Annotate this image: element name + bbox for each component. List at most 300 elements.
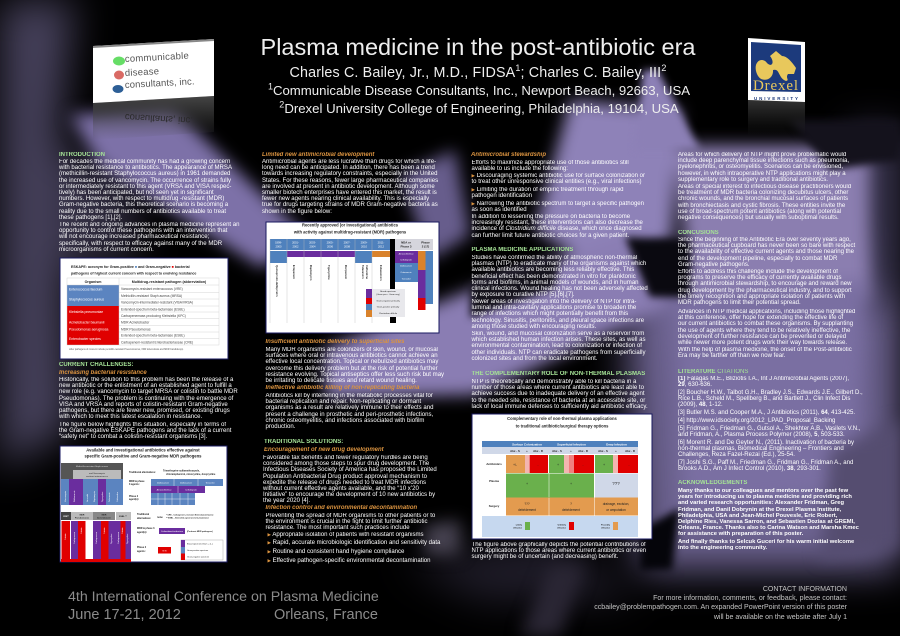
subheading: encouragement of new drug development: Encouragement of new drug development — [264, 446, 384, 452]
conclusions paragraph 2: Efforts to address this challenge include the development of — [678, 269, 838, 275]
plasma paragraph 3: Skin, wound, and mucosal colonization serve as a reservoir from — [472, 331, 644, 337]
ineffective killing paragraph: bacterial replication and repair. Non-replicating or dormant — [266, 399, 421, 405]
figure: complementary role table: Abx - R — [533, 449, 543, 453]
figure: recently approved antibiotics timeline: 2002 — [293, 244, 299, 248]
introduction paragraph 2: The recent and ongoing advances in plasma medicine represent an — [59, 222, 240, 228]
complementary paragraph: achieve success due to inadequate delivery of an effective agent — [472, 391, 645, 397]
infection control bullets — [268, 532, 440, 564]
problematic areas paragraph: supplementary role to surgery and traditional antibiotics. — [678, 177, 828, 183]
encouragement paragraph: Initiative” to encourage the development of 10 new antibiotics by — [263, 492, 435, 498]
figure: recently approved antibiotics timeline: 2007- — [344, 240, 351, 244]
title: Plasma medicine in the post-antibiotic era — [261, 34, 695, 60]
figure: available and investigational antibiotics: Linezolid — [87, 493, 89, 502]
figure: recently approved antibiotics timeline: Ceftobiprole — [400, 258, 413, 262]
figure: complementary role table: Superficial Infection — [557, 442, 586, 446]
stewardship closing paragraph: increasingly resistant, these interventions can also decrease the — [472, 220, 643, 226]
figure: complementary role table: Abx - S — [510, 449, 520, 453]
figure: ESKAPE table: ESKAPE: acronym for Gram-positive ■ and Gram-negative ■ bacterial — [71, 265, 190, 269]
figure: available and investigational antibiotics: Methicillin-resistant Staph aureus — [76, 465, 109, 468]
introduction paragraph 1: or intermediately resistant to this agent (VRSA and VISA respec- — [59, 184, 231, 190]
conclusions paragraph 2: drug development by the pharmaceutical industry, and to support — [678, 288, 852, 294]
acknowledgements paragraph 1: Delphine Ries, Vanessa Sarron, and Sebastien Dozias at GREMI, — [678, 519, 855, 525]
figure: available and investigational antibiotics: Carbapenem — [95, 532, 98, 544]
insufficient delivery paragraph: be irritating to delicate tissues and retard wound healing. — [266, 378, 417, 384]
figure: available and investigational antibiotics: Colistin — [64, 532, 67, 540]
areas of interest paragraph: be treatment of MDR bacteria colonizing decubitus ulcers, other — [678, 190, 848, 196]
figure: available and investigational antibiotics: Colistin — [121, 526, 124, 534]
plasma paragraph 2: among those studied with encouraging results. — [472, 324, 596, 330]
contact information: CONTACT INFORMATION — [763, 586, 847, 593]
figure: recently approved antibiotics timeline: 2001- — [292, 240, 299, 244]
acknowledgements paragraph 1 — [678, 488, 859, 537]
plasma paragraph 1: plasmas (NTP) to eradicate many of the organisms against which — [472, 261, 646, 267]
stewardship bullet 3 — [472, 201, 644, 213]
complementary paragraph: number of those areas where current antibiotics are least able to — [472, 385, 644, 391]
conclusions paragraph 1: to the availability of effective current agents and those nearing the — [678, 249, 854, 255]
figure: complementary role table: - — [582, 463, 584, 467]
introduction paragraph 1: tively) has been anticipated, but not seen yet in significant — [59, 190, 214, 196]
conclusions paragraph 2 — [678, 269, 852, 306]
figure: complementary role table: debridement — [518, 508, 536, 512]
infection control paragraph: Preventing the spread of MDR organisms to other patients or to — [266, 513, 435, 519]
stewardship closing paragraph: In addition to lessening the pressure on bacteria to become — [472, 214, 630, 220]
conclusions paragraph 3: while newer more potent drugs work their way towards release. — [678, 340, 847, 346]
figure: available and investigational antibiotics: Phase 2 — [137, 546, 147, 549]
acknowledgements paragraph 2: And finally thanks to Selcuk Guceri for his warm initial welcome — [678, 539, 854, 545]
plasma paragraph 1: clinical infections. Wound healing has not been adversely affected — [472, 286, 648, 292]
ineffective killing paragraph — [266, 393, 434, 430]
stewardship bullet 2: pathogen identification — [472, 193, 532, 199]
figure: complementary role table: Abx - S — [598, 449, 608, 453]
challenges paragraph 2: the Gram-negative ESKAPE pathogens and the lack of a current — [59, 428, 231, 434]
figure caption: NTP applications to those areas where current antibiotics or even — [472, 548, 646, 554]
conclusions paragraph 1: Since the beginning of the Antibiotic Era over seventy years ago, — [678, 237, 851, 243]
figure: recently approved antibiotics timeline: Recently approved (or investigational) antibiotics — [302, 222, 399, 228]
infection control paragraph — [266, 513, 435, 531]
figure caption: surgery might be of uncertain (and decreasing) benefit. — [472, 554, 618, 560]
figure: available and investigational antibiotics: alternatives: — [137, 517, 151, 520]
citations list: [1] Falagas M.E., Bliziotis I.A., Int J Antimicrobial Agents (2007), — [678, 376, 849, 382]
subheading: insufficient antibiotic delivery: Insufficient antibiotic delivery to superficial sites — [266, 338, 404, 344]
figure: recently approved antibiotics timeline: Quinupristin-dalfopristin — [275, 265, 279, 297]
citations list: Brooks A.D., Am J Infect Control (2010), 38, 293-301. — [678, 466, 821, 472]
areas of interest paragraph: with bronchiectasis and cystic fibrosis. These entities invite the — [678, 203, 845, 209]
areas of interest paragraph — [678, 184, 851, 221]
challenges paragraph 1: Historically, the solution to this problem has been the release of a — [59, 377, 233, 383]
figure: available and investigational antibiotics: Trimethoprim-sulfamethoxazole, — [163, 470, 200, 472]
figure: recently approved antibiotics timeline: Broad-spectrum — [380, 290, 396, 293]
subheading: antimicrobial stewardship: Antimicrobial stewardship — [471, 152, 546, 158]
figure: available and investigational antibiotics: Carbapenem — [117, 532, 120, 544]
figure: ESKAPE table: Pseudomonas aeruginosa — [69, 328, 109, 332]
introduction paragraph 1: numbers. However, with respect to multidrug -resistant (MDR) — [59, 196, 224, 202]
figure: available and investigational antibiotics: none — [157, 516, 163, 519]
insufficient delivery paragraph: surfaces where oral or intravenous antibiotics cannot achieve an — [266, 353, 438, 359]
figure: complementary role table: Plasma — [489, 479, 499, 483]
figure: available and investigational antibiotics: Tenovolvi — [205, 482, 215, 484]
figure: recently approved antibiotics timeline: Clostridium difficile — [379, 312, 398, 315]
figure: complementary role table: ??? — [612, 481, 620, 486]
figure: ESKAPE table: MDR Acinetobacter — [121, 320, 150, 324]
citations list: (2009), 48, 1-12. [3] Butler M.S. and Cooper M.A., J Antibiotics (2011), 64, 413-425. [4] http://www.idsociety.org/2012_LPAD_Proposal_Backing [5] Fridman G., Friedman G., Gutsol A., Shekhter A.B., Vasilets V.N., — [678, 402, 860, 432]
introduction paragraph 2: opportunity to control these pathogens with an intervention that — [59, 228, 227, 234]
figure: recently approved antibiotics timeline: 2010 — [361, 244, 367, 248]
problematic areas paragraph: include deep parenchymal tissue infections such as pneumonia, — [678, 158, 849, 164]
conclusions paragraph 3: development of further resistance can be prevented or delayed — [678, 334, 846, 340]
figure: ESKAPE table: other pathogens of concern include penicillin-resistant Pneumococcus, XDR tuberculosis and MDR Candida spp. — [69, 348, 184, 351]
figure: ESKAPE table: Enterococcus faecium — [69, 288, 103, 292]
plasma paragraph 1: Studies have confirmed the ability of atmospheric non-thermal — [472, 255, 637, 261]
figure: available and investigational antibiotics: Colistin — [80, 526, 83, 534]
subheading: ineffective antibiotic killing: Ineffective antibiotic killing of non-replicating bacteria — [266, 384, 419, 390]
figure: available and investigational antibiotics: Tigecycline — [102, 491, 104, 502]
figure: available and investigational antibiotics: M N — [162, 550, 167, 552]
citations list: 29, 630-636. [2] Boucher H.W., Talbot G.H., Bradley J.S., Edwards J.E., Gilbert D., — [678, 382, 863, 396]
figure: recently approved antibiotics timeline: 1999- — [275, 240, 282, 244]
complementary paragraph: to the needed site, resistance of bacteria at an accessible site, or — [472, 398, 645, 404]
figure: complementary role table: Deep Infection — [606, 442, 627, 446]
figure: available and investigational antibiotics: Ceftaroline — [116, 491, 119, 502]
figure: available and investigational antibiotics: Amoxicillin/clav — [157, 488, 172, 492]
introduction paragraph 1: these pathogens [1],[2]. — [59, 215, 122, 221]
logo: communicable disease consultants: communicable — [125, 51, 189, 65]
section: introduction: INTRODUCTION — [59, 152, 105, 158]
figure: available and investigational antibiotics: agent(s): — [137, 531, 147, 534]
stewardship bullet 2 — [472, 187, 624, 199]
figure: complementary role table: Likely — [516, 524, 523, 526]
figure: available and investigational antibiotics: ESBL ** — [119, 516, 127, 518]
figure: available and investigational antibiotics: Gram-negative spectrum — [187, 556, 209, 558]
introduction paragraph 1: the increased use of vancomycin. The occurrence of strains fully — [59, 178, 231, 184]
figure: ESKAPE table: Multidrug-resistant pathogen (abbreviation) — [132, 280, 207, 284]
figure: available and investigational antibiotics: and Vancomycin — [89, 473, 106, 475]
complementary paragraph: lack of local immune defenses to sufficiently aid antibiotic efficacy. — [472, 404, 648, 410]
figure: complementary role table: Possibly — [601, 524, 611, 526]
stewardship bullet 3: ▶ Narrowing the antibiotic spectrum to target a specific pathogen — [472, 201, 644, 207]
figure: recently approved antibiotics timeline: Tigecycline — [327, 265, 331, 280]
conclusions paragraph 2: through antimicrobial stewardship, to encourage and reward new — [678, 281, 851, 287]
plasma paragraph 1: available antibiotics are becoming less reliably effective. This — [472, 267, 634, 273]
insufficient delivery paragraph: effective local concentration. Topical or nebulized antibiotics may — [266, 359, 438, 365]
encouragement paragraph: Population Antibacterial Drug product approval mechanism to — [263, 474, 427, 480]
stewardship bullets — [472, 173, 645, 185]
figure: complementary role table: - — [628, 463, 630, 467]
figure caption: The figure above graphically depicts the potential contributions of — [472, 542, 646, 548]
acknowledgements paragraph 1: for assistance with preparation of this poster. — [678, 531, 803, 537]
figure: recently approved antibiotics timeline: 2004 — [310, 244, 316, 248]
limited development paragraph: smaller biotech enterprises have entered this market, the result is — [262, 190, 437, 196]
figure: available and investigational antibiotics: Available and investigational antibiotics effective against — [86, 448, 200, 452]
conclusions paragraph 1: the pharmaceutical cupboard has never been so bare with respect — [678, 243, 855, 249]
challenges paragraph 1: new role (e.g. vancomycin to target MRSA or colistin to battle MDR — [59, 389, 238, 395]
figure: available and investigational antibiotics: Ceftobiprole — [185, 488, 198, 492]
conclusions paragraph 3 — [678, 309, 855, 346]
plasma paragraph 1: by exposure to curative NTP [5],[6],[7]. — [472, 292, 575, 298]
figure: recently approved antibiotics timeline: 2012 — [378, 244, 384, 248]
figure: available and investigational antibiotics: Gram-positive spectrum — [187, 549, 209, 552]
figure: recently approved antibiotics timeline: Daptomycin — [309, 265, 313, 281]
figure: available and investigational antibiotics: Vancomycin — [65, 490, 67, 502]
introduction paragraph 2: microorganisms of current concern. — [59, 247, 154, 253]
infection control paragraph: resistance. The most important such practices include — [266, 525, 410, 531]
acknowledgements paragraph 1: Many thanks to our colleagues and mentors over the past few — [678, 488, 848, 494]
figure: available and investigational antibiotics: (Pertinent MDR pathogens) — [187, 530, 213, 533]
infection control bullets: ▶ Rapid, accurate microbiologic identification and sensitivity data — [268, 540, 440, 546]
plasma paragraph 2: range of infections which might potentially benefit from this — [472, 311, 628, 317]
challenges paragraph 2: The figure below highlights this situation, especially in terms of — [59, 422, 226, 428]
figure: complementary role table: Abx - R — [625, 449, 635, 453]
limited development paragraph: fewer new agents nearing clinical availability. This is especially — [262, 196, 429, 202]
complementary paragraph: NTP is theoretically and demonstrably able to kill bacteria in a — [472, 379, 636, 385]
figure: available and investigational antibiotics: Tigecycline — [127, 533, 129, 544]
conference name: 4th International Conference on Plasma Medicine — [68, 589, 379, 605]
figure: complementary role table: drainage, excision, — [603, 502, 629, 506]
encouragement paragraph — [263, 455, 437, 504]
figure: complementary role table: - — [537, 463, 539, 467]
stewardship intro — [472, 160, 629, 172]
stewardship intro: Efforts to maximize appropriate use of those antibiotics still — [472, 160, 629, 166]
plasma paragraph 2: luminal and intra-cavitary applications promise to broaden the — [472, 305, 636, 311]
acknowledgements paragraph 1: Fridman, and Danil Dobrynin at the Drexel Plasma Institute, — [678, 507, 841, 513]
conclusions paragraph 1: Gram-negative pathogens. — [678, 262, 750, 268]
limited development paragraph: States. For these reasons, fewer large pharmaceutical companies — [262, 178, 438, 184]
citations list: Rice L.B., Scheld M., Spellberg B., and Bartlett J., Clin Infect Dis — [678, 396, 850, 402]
figure: recently approved antibiotics timeline: Ertapenem — [292, 265, 296, 280]
infection control bullets: ▶ Appropriate isolation of patients with resistant organisms — [268, 532, 424, 538]
figure: complementary role table: Surgery — [489, 504, 500, 508]
figure: available and investigational antibiotics: agents: — [137, 550, 146, 553]
figure: recently approved antibiotics timeline: Fidaxomicin — [379, 265, 383, 281]
figure: available and investigational antibiotics: Phase 2 — [129, 495, 139, 498]
problematic areas paragraph — [678, 152, 849, 183]
figure: available and investigational antibiotics: Acinetobacter — [97, 516, 111, 520]
figure: recently approved antibiotics timeline: with activity against multidrug-resistant (MDR) pathogens — [293, 230, 407, 234]
challenges paragraph 1: new antibiotic or the enlistment of an established agent to fulfill a — [59, 383, 232, 389]
ineffective killing paragraph: present a challenge in prosthetic and peri-prosthetic infections, — [266, 412, 433, 418]
logo: communicable disease consultants: consultants, inc. — [125, 76, 195, 91]
infection control paragraph: the environment is crucial in the fight to limit further antibiotic — [266, 519, 428, 525]
plasma paragraph 1: forms and biofilms, in animal models of wounds, and in human — [472, 280, 639, 286]
figure: ESKAPE table: Vancomycin-intermediate/-resistant (VISA/VRSA) — [121, 300, 193, 304]
figure: recently approved antibiotics timeline: Dalbavancin — [400, 266, 413, 268]
conclusions paragraph 1: end of the development pipeline, especially to combat MDR — [678, 256, 837, 262]
contact information: For more information, comments, or feedback, please contact: — [653, 595, 847, 602]
areas of interest paragraph: negative consequences) but usually with suboptimal results. — [678, 215, 839, 221]
figure: ESKAPE table: pathogens of highest current concern with respect to evolving resistance — [71, 272, 196, 276]
figure: ESKAPE table: Methicillin-resistant Staph aureus (MRSA) — [121, 294, 182, 298]
challenges paragraph 2: “safety net” to combat a colistin-resistant organisms [3]. — [59, 434, 207, 440]
figure: complementary role table: Complementary role of non-thermal plasma applications — [507, 416, 618, 421]
stewardship bullet 3: as soon as identified — [472, 207, 527, 213]
section: plasma medicine applications: PLASMA MEDICINE APPLICATIONS — [472, 246, 573, 252]
authors: Charles C. Bailey, Jr., M.D., FIDSA1; Charles C. Bailey, III2 — [290, 63, 666, 81]
conclusions paragraph 2: the timely recognition and appropriate isolation of patients with — [678, 294, 845, 300]
figure: available and investigational antibiotics: specific Gram-positive and Gram-negative MDR pathogens — [84, 454, 202, 458]
encouragement paragraph: Infectious Diseases Society of America has proposed the Limited — [263, 467, 437, 473]
introduction paragraph 2: specifically, with respect to efficacy against many of the MDR — [59, 241, 222, 247]
plasma paragraph 2: technology. Sinusitis, peritonitis, and pleural space infections are — [472, 318, 644, 324]
figure: complementary role table: or amputation — [606, 508, 626, 512]
figure: complementary role table: effective — [601, 526, 611, 530]
section: conclusions: CONCUSIONS — [678, 230, 719, 236]
logo: communicable disease consultants — [93, 39, 214, 136]
conclusions paragraph 3: our current antibiotics to combat these organisms. By supplanting — [678, 321, 853, 327]
plasma paragraph 2: Newer areas of investigation into the delivery of NTP for intra- — [472, 299, 636, 305]
figure: complementary role table: effective — [513, 526, 523, 530]
section: complementary role: THE COMPLEMENTARY ROLE OF NON-THERMAL PLASMAS — [472, 370, 645, 376]
figure: complementary role table: + — [557, 463, 559, 467]
figure: ESKAPE table: Vancomycin-resistant enterococcus (VRE) — [121, 287, 183, 291]
areas of interest paragraph: chronic wounds, and the bronchial mucosal surfaces of patients — [678, 196, 848, 202]
figure: complementary role table: + — [526, 449, 528, 453]
problematic areas paragraph: pyelonephritis, or osteomyelitis. Scenarios can be envisioned, — [678, 164, 843, 170]
section: acknowledgements: ACKNOWLEDGEMENTS — [678, 480, 747, 486]
stewardship bullets: ▶ Discouraging systemic antibiotic use for surface colonization or — [472, 173, 645, 179]
figure: recently approved antibiotics timeline: 2000 — [276, 244, 282, 248]
figure: recently approved antibiotics timeline: Doripenem — [344, 265, 348, 280]
introduction paragraph 1: (methicillin-resistant Staphylococcus aureus) in 1961 demanded — [59, 171, 230, 177]
insufficient delivery paragraph: Many MDR organisms are colonizers of skin, wound, or mucosal — [266, 347, 438, 353]
figure: available and investigational antibiotics: Carbapenem — [73, 532, 76, 544]
challenges paragraph 1: VISA and VRSA and reports of colistin-resistant Gram-negative — [59, 402, 228, 408]
logo: Drexel University: UNIVERSITY — [754, 96, 798, 101]
figure: complementary role table: + — [570, 482, 572, 486]
figure: recently approved antibiotics timeline: 2008 — [344, 244, 350, 248]
figure: recently approved antibiotics timeline: Oritavancin — [400, 271, 412, 274]
plasma paragraph 3: which established human infection arises. These sites, as well as — [472, 337, 646, 343]
conclusions paragraph 2: MDR pathogens to limit their potential spread. — [678, 300, 801, 306]
figure: available and investigational antibiotics: ** ESBL - Extended-spectrum beta-lactamase — [166, 516, 210, 520]
limited development paragraph — [262, 159, 438, 215]
limited development paragraph: are involved at present in antibiotic development. Although some — [262, 184, 435, 190]
affiliation 2: 2Drexel University College of Engineering, Philadelphia, 19104, USA — [279, 100, 679, 116]
figure: complementary role table: Abx - R — [578, 449, 588, 453]
limited development paragraph: true for drugs targeting strains of MDR Gram-negative bacteria as — [262, 202, 438, 208]
limited development paragraph: shown in the figure below: — [262, 209, 332, 215]
figure: recently approved antibiotics timeline: (Gram pos + Gram neg) — [376, 293, 400, 296]
figure: available and investigational antibiotics: Telavancin — [109, 491, 111, 502]
figure: recently approved antibiotics timeline: Torezolid — [402, 278, 411, 280]
plasma paragraph 3: environmental contamination, lead to colonization or infection of — [472, 343, 642, 349]
figure: ESKAPE table: Staphylococcus aureus — [69, 298, 104, 302]
figure: recently approved antibiotics timeline: NDA or — [401, 240, 412, 244]
figure: available and investigational antibiotics: Colistin — [103, 526, 106, 534]
logo: Drexel University — [748, 38, 805, 128]
figure: complementary role table: +/- — [513, 463, 517, 467]
figure: available and investigational antibiotics: MDR — [80, 514, 85, 516]
figure: recently approved antibiotics timeline: Gram-negative primarily — [376, 300, 401, 302]
introduction paragraph 1: For decades the medical community has had a growing concern — [59, 159, 230, 165]
encouragement paragraph: considered among those steps to spur drug development. The — [263, 461, 429, 467]
citations list: Challenges, Reza Fazel-Rezai (Ed.), 25-54. [7] Joshi S.G., Paff M., Friedman G., Fridman G., Fridman A., and — [678, 452, 853, 466]
stewardship intro: available to us include the following: — [472, 166, 568, 172]
subheading: increasing bacterial resistance: Increasing bacterial resistance — [59, 370, 147, 376]
figure: complementary role table: ??? — [524, 502, 530, 506]
infection control bullets: ▶ Effective pathogen-specific environmental decontamination — [268, 558, 431, 564]
introduction paragraph 1: Gram-negative bacteria, this theoretical scenario is becoming a — [59, 202, 228, 208]
figure: recently approved antibiotics timeline: 2011- — [378, 240, 384, 244]
figure: ESKAPE table: Organism — [85, 280, 101, 284]
figure: available and investigational antibiotics: Traditional alternatives: — [129, 471, 156, 474]
subheading: infection control: Infection control and environmental decontamination — [266, 504, 417, 510]
encouragement paragraph: the year 2020 [4]. — [263, 498, 310, 504]
conclusions paragraph 3: the use of agents where they tend to be relatively ineffective, the — [678, 328, 850, 334]
acknowledgements paragraph 2: into the engineering community. — [678, 545, 767, 551]
conclusions paragraph 3: at this conference, offer hope for extending the effective life of — [678, 315, 843, 321]
insufficient delivery paragraph — [266, 347, 444, 384]
complementary paragraph — [472, 379, 648, 410]
figure: recently approved antibiotics timeline: Ceftaroline — [365, 265, 369, 280]
acknowledgements paragraph 2 — [678, 539, 854, 551]
figure: ESKAPE table: MDR Pseudomonas — [121, 328, 151, 332]
figure: complementary role table: Surface Colonization — [512, 442, 542, 446]
figure: available and investigational antibiotics: MDR & phase 3 — [137, 527, 155, 530]
conclusions paragraph 2: programs to preserve the efficacy of currently available drugs — [678, 275, 842, 281]
limited development paragraph: Antimicrobial agents are less lucrative than drugs for which a life- — [262, 159, 436, 165]
acknowledgements paragraph 1: Philadelphia, USA and Jean-Michel Pouvesle, Eric Robert, — [678, 513, 837, 519]
figure: available and investigational antibiotics: CRE** — [63, 516, 69, 518]
figure: recently approved antibiotics timeline: 2003- — [309, 240, 316, 244]
challenges paragraph 1: Pseudomonas). The problem is continuing with the emergence of — [59, 396, 233, 402]
figure: ESKAPE table: Acinetobacter baumanii — [69, 320, 105, 324]
section: current challenges: CURRENT CHALLENGES: — [59, 362, 133, 368]
figure: complementary role table: Antibiotics — [486, 462, 502, 466]
plasma paragraph 1: beneficial effect has been demonstrated in vitro for planktonic — [472, 274, 636, 280]
stewardship closing paragraph: incidence of Clostridium difficile disease, which once diagnosed — [472, 226, 642, 232]
conclusions paragraph 4: Era may be farther off than we now fear. — [678, 353, 785, 359]
figure: complementary role table: Unlikely — [558, 524, 567, 526]
figure: ESKAPE table: Carbapenem-resistant Enterobacteriaceae (CRE) — [121, 340, 193, 344]
introduction paragraph 1 — [59, 159, 232, 221]
challenges paragraph 2 — [59, 422, 232, 440]
introduction paragraph 1: reality due to the small numbers of antibiotics available to treat — [59, 209, 226, 215]
figure: recently approved antibiotics timeline: 2009- — [361, 240, 368, 244]
conference location: Orleans, France — [274, 607, 378, 623]
insufficient delivery paragraph: resistance evolving. Topical antiseptics offer less such risk but may — [266, 372, 444, 378]
figure: available and investigational antibiotics: Daptomycin — [93, 490, 96, 502]
plasma paragraph 3 — [472, 331, 646, 362]
section: traditional solutions: TRADITIONAL SOLUTIONS: — [264, 438, 343, 444]
logo: Drexel University: Drexel — [753, 78, 798, 94]
figure: recently approved antibiotics timeline: 2 (17) — [422, 244, 429, 248]
acknowledgements paragraph 1: years for introducing us to plasma medicine and providing rich — [678, 494, 852, 500]
figure: available and investigational antibiotics: Dalbavancin — [157, 482, 170, 484]
citations list: and Fridman, A., Plasma Process Polymer (2008), 5, 503-533. [6] Morent R. and De Geyter N., (2011). Inactivation of bacteria by — [678, 432, 854, 446]
plasma paragraph 1 — [472, 255, 648, 298]
figure: ESKAPE table: Extended-spectrum beta-lactamase (ESBL) — [121, 334, 185, 338]
affiliation 1: 1Communicable Disease Consultants, Inc., Newport Beach, 92663, USA — [268, 82, 690, 98]
plasma paragraph 3: colonized sites and from the local environment. — [472, 356, 598, 362]
citations list — [678, 376, 863, 472]
figure: recently approved antibiotics timeline: 2005- — [327, 240, 334, 244]
figure: complementary role table: debridement — [562, 508, 580, 512]
figure: recently approved antibiotics timeline: 2006 — [327, 244, 333, 248]
figure: complementary role table: + — [603, 463, 605, 467]
ineffective killing paragraph: chronic osteomyelitis, and infections associated with biofilm — [266, 418, 424, 424]
stewardship closing paragraph — [472, 214, 643, 239]
subheading: limited new antimicrobial development: Limited new antimicrobial development — [262, 152, 374, 158]
introduction paragraph 1: with bacterial resistance to antibiotics. The appearance of MRSA — [59, 165, 232, 171]
challenges paragraph 1 — [59, 377, 238, 420]
infection control bullets: ▶ Routine and consistent hand hygiene compliance — [268, 549, 404, 555]
figure: available and investigational antibiotics: chloramphenicol, minocycline, doxycycline — [166, 473, 216, 476]
figure: available and investigational antibiotics: Traditional — [137, 513, 149, 516]
figure: available and investigational antibiotics: MDR — [102, 514, 107, 516]
figure: available and investigational antibiotics: resistant enterococcus — [86, 475, 109, 478]
encouragement paragraph: without current effective agents available, and the “10 x’20 — [263, 486, 419, 492]
conclusions paragraph 4 — [678, 347, 852, 359]
conclusions paragraph 1 — [678, 237, 856, 268]
